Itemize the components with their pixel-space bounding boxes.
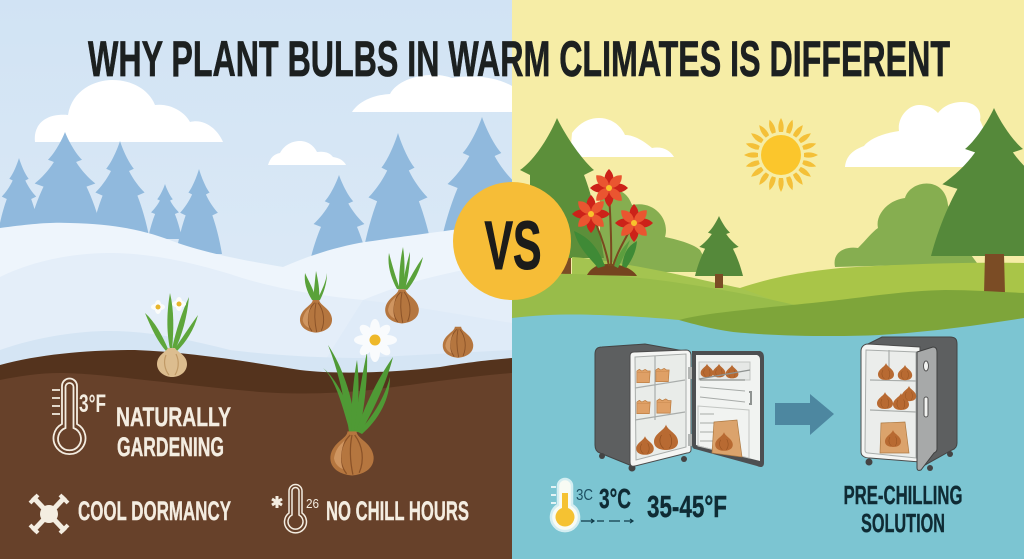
icon: yellow thermometer — [551, 479, 579, 531]
panel: cold climate side — [0, 0, 524, 559]
water-blue lower panel — [512, 314, 1024, 559]
snow hills — [0, 222, 512, 400]
icon: white daisy — [354, 319, 397, 362]
bulb: small bulb — [443, 327, 473, 358]
icon: thermometer 3°F — [52, 379, 86, 454]
bulb: large bulb in soil — [323, 345, 393, 476]
icon: cool dormancy snow cross — [30, 495, 68, 533]
clouds: warm sky — [570, 102, 1000, 167]
badge: VS: VS — [484, 207, 542, 284]
soil ground — [0, 350, 512, 559]
bulb: sprouted bulb left — [300, 271, 332, 333]
panel: warm climate side — [512, 0, 1024, 559]
trees: frosted pine forest — [0, 117, 524, 270]
icon: open refrigerator with bulbs — [595, 344, 764, 472]
icon: red flower plant — [572, 169, 653, 276]
trees and bushes: warm background — [520, 108, 1024, 276]
label: pre-chilling solution: SOLUTION — [861, 508, 945, 538]
label: naturally gardening: GARDENING — [117, 432, 224, 462]
icon: snowflake thermometer: 26 — [306, 496, 319, 511]
label: pre-chilling solution: PRE-CHILLING — [844, 480, 962, 510]
label: 3°C: 3°C — [599, 483, 631, 514]
label: no chill hours: NO CHILL HOURS — [326, 496, 469, 526]
dashed arrow — [581, 519, 633, 523]
bulb: shallow sprouting bulb with flowers — [145, 293, 198, 377]
label: cool dormancy: COOL DORMANCY — [78, 496, 231, 526]
green hills — [720, 263, 1024, 340]
label: 3C small: 3C — [576, 487, 593, 504]
icon: snowflake thermometer — [272, 485, 319, 533]
label: naturally gardening: NATURALLY — [116, 402, 231, 432]
tree trunks — [715, 254, 1005, 294]
icon: closed-door refrigerator with bulbs — [861, 337, 957, 471]
label: 35-45°F: 35-45°F — [647, 489, 727, 524]
clouds: cold sky — [35, 75, 512, 165]
arrow: fridge to fridge — [775, 394, 834, 435]
label: 3°F: 3°F — [79, 390, 106, 418]
icon: sun — [744, 118, 818, 192]
badge: VS — [453, 182, 571, 300]
label: pre-chilling solution — [844, 480, 962, 538]
label: naturally gardening — [116, 402, 231, 462]
bulb: sprouted bulb right — [385, 247, 423, 324]
